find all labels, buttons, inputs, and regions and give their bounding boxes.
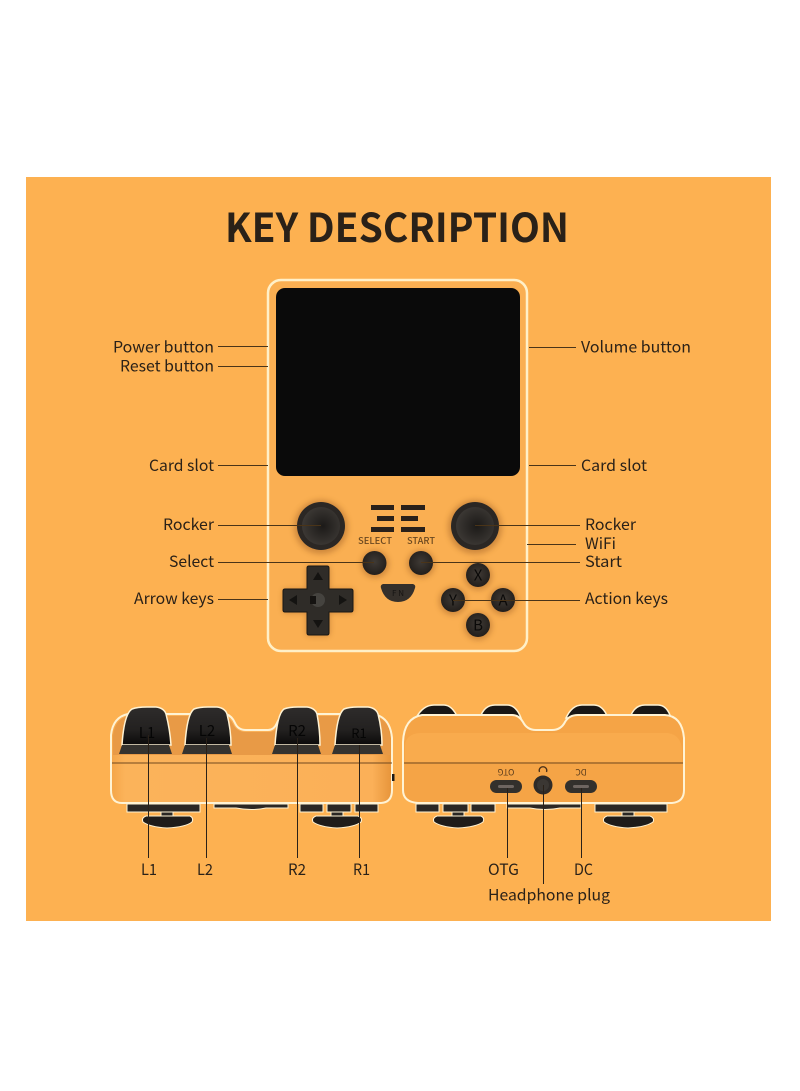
fn key — [381, 584, 415, 602]
bottom labels: L1 — [141, 858, 157, 880]
bottom leader lines — [148, 735, 582, 884]
underside controls — [416, 804, 667, 828]
otg port: OTG — [497, 766, 514, 778]
select button — [362, 551, 386, 575]
L1 key — [119, 707, 172, 754]
bottom labels — [141, 858, 610, 906]
right labels — [581, 336, 691, 609]
right labels: Volume button — [581, 336, 691, 358]
L2 key — [182, 707, 232, 754]
shell — [403, 715, 684, 803]
right labels: Action keys — [585, 587, 668, 609]
bottom labels: R2 — [288, 858, 306, 880]
R1 key — [332, 707, 383, 754]
left labels — [113, 336, 215, 609]
bottom labels: L2 — [197, 858, 213, 880]
L2 key: L2 — [199, 720, 215, 741]
screen — [276, 288, 520, 476]
right labels: Rocker — [585, 513, 637, 535]
right labels: WiFi — [585, 532, 616, 554]
underside controls — [127, 804, 378, 828]
action buttons: Y — [448, 590, 457, 610]
select and start labels: START — [407, 534, 436, 547]
speaker grille — [371, 505, 425, 532]
dc port: DC — [575, 766, 587, 778]
left shoulder view — [111, 707, 404, 828]
select and start labels — [358, 534, 436, 547]
right labels: Start — [585, 550, 622, 572]
d-pad — [283, 566, 353, 635]
bottom labels: DC — [574, 858, 593, 880]
console front view — [268, 280, 527, 651]
left labels: Select — [169, 550, 214, 572]
L1 key: L1 — [139, 722, 155, 743]
left labels: Power button — [113, 336, 214, 358]
seam line — [112, 762, 392, 764]
left labels: Rocker — [163, 513, 215, 535]
right leader lines — [421, 348, 580, 600]
headphone jack — [534, 767, 552, 794]
shell top shade — [113, 716, 390, 755]
right labels: Card slot — [581, 454, 647, 476]
side marks — [392, 774, 404, 781]
R1 key: R1 — [351, 723, 367, 742]
start button — [409, 551, 433, 575]
top key stubs — [416, 705, 671, 718]
left labels: Arrow keys — [134, 587, 214, 609]
R2 key — [272, 707, 321, 754]
R2 key: R2 — [288, 720, 306, 741]
seam line — [404, 762, 683, 764]
right rocker — [451, 502, 499, 550]
bottom labels: Headphone plug — [488, 884, 610, 906]
background panel — [26, 177, 771, 921]
title: KEY DESCRIPTION — [225, 196, 569, 254]
action buttons: A — [498, 590, 508, 610]
select and start labels: SELECT — [358, 534, 393, 547]
left leader lines — [218, 346, 374, 600]
bottom labels: OTG — [488, 858, 519, 880]
action buttons — [441, 563, 515, 637]
dc port — [565, 766, 597, 793]
control shadows — [283, 500, 517, 640]
console body — [268, 280, 527, 651]
shell highlight — [405, 733, 682, 762]
left labels: Card slot — [149, 454, 214, 476]
shell — [111, 714, 392, 803]
action buttons: B — [473, 614, 483, 636]
left rocker — [297, 502, 345, 550]
left labels: Reset button — [120, 354, 214, 376]
bottom labels: R1 — [353, 858, 370, 880]
fn key: F N — [392, 588, 404, 599]
otg port — [490, 766, 522, 793]
action buttons: X — [474, 564, 483, 586]
right port view — [403, 705, 684, 828]
